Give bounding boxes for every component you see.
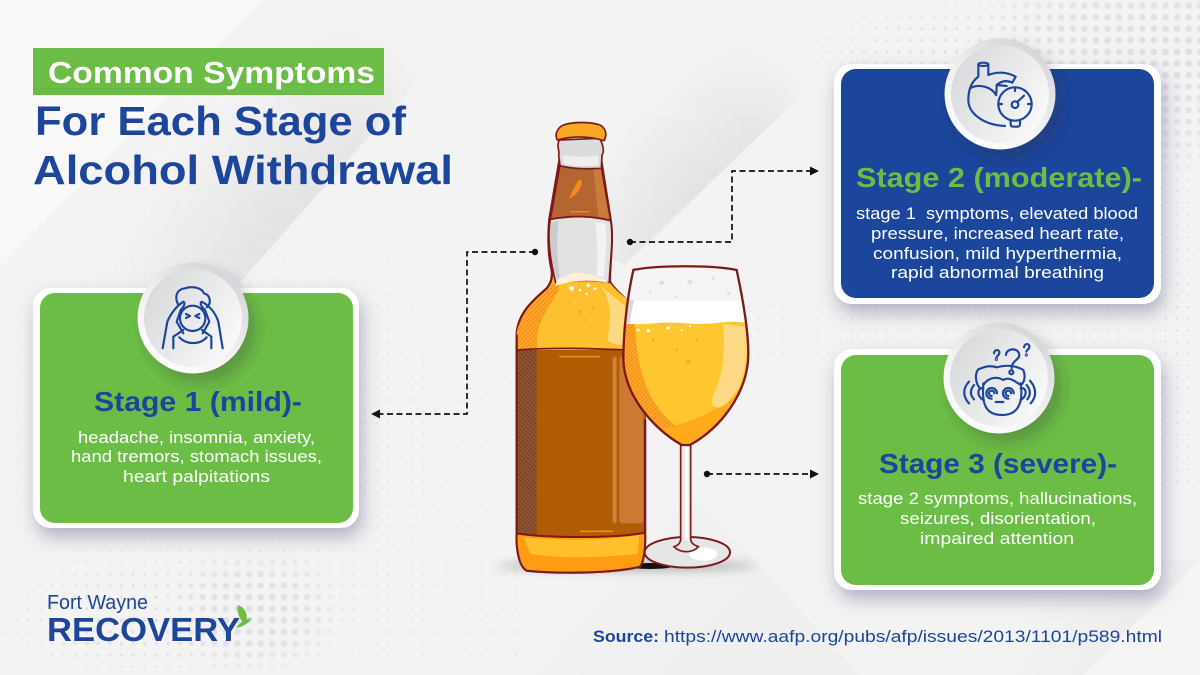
panel: stage 1 xyxy=(33,262,359,528)
source citation: Source: xyxy=(593,627,659,646)
stage 2 heading: Stage 2 (moderate)- xyxy=(856,162,1142,193)
stage 2 description: rapid abnormal breathing xyxy=(891,264,1104,282)
card stage 1 xyxy=(33,288,359,528)
logo: Fort Wayne Recovery: Fort Wayne xyxy=(47,592,148,614)
arrow: glass to stage 3 xyxy=(704,470,819,478)
beer bottle xyxy=(513,122,645,573)
foam in bottle neck xyxy=(555,273,609,286)
bottle base xyxy=(517,533,645,573)
stage 1 description: hand tremors, stomach issues, xyxy=(71,448,322,466)
stage 3 description: impaired attention xyxy=(920,530,1074,548)
glass outline xyxy=(623,266,748,445)
glass foot xyxy=(645,537,730,568)
logo: Fort Wayne Recovery xyxy=(47,592,252,648)
panel: stage 3 xyxy=(834,322,1161,590)
logo leaf xyxy=(236,605,252,628)
stage 1 description: headache, insomnia, anxiety, xyxy=(78,429,315,447)
title xyxy=(33,48,453,193)
stage 2 description xyxy=(856,205,1138,282)
stage 2 description: confusion, mild hyperthermia, xyxy=(873,245,1122,263)
glass stem xyxy=(674,444,698,552)
beer in bottle shoulder xyxy=(516,282,627,350)
title line 2: For Each Stage of xyxy=(35,98,406,144)
title highlight: Common Symptoms: Common Symptoms xyxy=(48,55,375,90)
badge: heart pressure icon xyxy=(944,38,1056,150)
source citation: https://www.aafp.org/pubs/afp/issues/2013/1101/p589.html xyxy=(664,627,1162,646)
stage 3 description: seizures, disorientation, xyxy=(900,510,1096,528)
wine glass xyxy=(620,265,753,568)
stage 1 heading: Stage 1 (mild)- xyxy=(94,386,302,417)
card stage 2 xyxy=(834,64,1161,304)
neck label xyxy=(550,165,611,221)
stage 2 description: pressure, increased heart rate, xyxy=(871,225,1124,243)
icon: confused head xyxy=(964,344,1035,415)
card stage 3 xyxy=(834,349,1161,590)
stage 1 description xyxy=(71,429,322,486)
title line 3: Alcohol Withdrawal xyxy=(33,147,453,193)
stage 3 description: stage 2 symptoms, hallucinations, xyxy=(858,490,1137,508)
glass bowl with beer xyxy=(624,276,748,444)
badge: headache icon xyxy=(138,262,248,374)
illustration: beer bottle and glass xyxy=(497,122,757,573)
bottle cap xyxy=(556,122,606,141)
arrow: bottle to stage 2 xyxy=(627,166,819,245)
stage 1 description: heart palpitations xyxy=(123,468,270,486)
lower neck foil xyxy=(549,217,612,284)
icon: heart with gauge xyxy=(968,63,1032,127)
bottle neck top xyxy=(558,138,603,169)
arrow: bottle to stage 1 xyxy=(371,249,538,418)
panel: stage 2 xyxy=(834,38,1161,304)
stage 3 heading: Stage 3 (severe)- xyxy=(879,448,1117,479)
main bottle label xyxy=(517,350,645,536)
icon: headache xyxy=(163,287,223,348)
title highlight: Common Symptoms xyxy=(33,48,384,95)
badge: confusion icon xyxy=(944,322,1054,434)
stage 2 description: stage 1 symptoms, elevated blood xyxy=(856,205,1138,223)
logo: Fort Wayne Recovery: RECOVERY xyxy=(47,611,240,648)
stage 3 description xyxy=(858,490,1137,548)
ground shadow xyxy=(497,562,757,570)
